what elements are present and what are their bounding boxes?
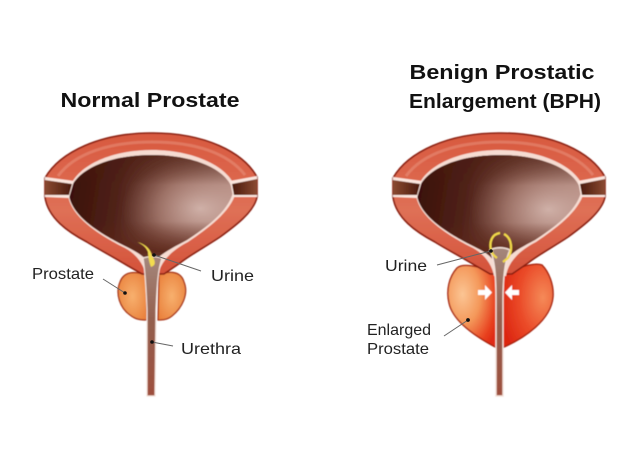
- icon: white arrow right: [478, 285, 492, 300]
- right ureter band: [230, 176, 257, 197]
- icon: white arrow left: [505, 285, 519, 300]
- label: Prostate: Prostate: [32, 266, 94, 283]
- leader line: Urine left: [152, 253, 201, 271]
- left ureter band: [45, 177, 74, 198]
- bladder lumen: [69, 155, 233, 262]
- left ureter band: [393, 177, 422, 198]
- inner pale lining: [68, 150, 236, 276]
- bladder wall: [393, 133, 605, 274]
- right ureter band: [578, 176, 605, 197]
- wall highlight: [58, 142, 245, 176]
- leader line: Urine right: [437, 249, 493, 265]
- prostate: enlarged right lobe: [502, 264, 553, 348]
- label: Enlarged Prostate: Prostate: [367, 341, 429, 358]
- leader line: Enlarged Prostate: [444, 318, 470, 336]
- urethra: [490, 248, 510, 396]
- label: Enlarged Prostate: Enlarged: [367, 322, 431, 339]
- leader line: Urethra: [150, 340, 173, 346]
- urethra: [143, 256, 162, 396]
- title: Benign Prostatic Enlargement (BPH): Enlargement (BPH): [409, 90, 601, 113]
- icon: urine flow yellow: [137, 242, 155, 267]
- icon: urine swirl yellow: [490, 233, 511, 262]
- wall highlight: [406, 142, 593, 176]
- label: Urine left: Urine: [211, 268, 254, 285]
- label: Urethra: Urethra: [181, 341, 241, 358]
- prostate: enlarged left lobe: [448, 265, 497, 348]
- diagram: normal prostate bladder: [45, 133, 257, 396]
- leader line: Prostate: [103, 279, 127, 295]
- bladder lumen: [417, 155, 581, 264]
- title: Benign Prostatic Enlargement (BPH): Benign Prostatic: [410, 61, 594, 84]
- bladder wall: [45, 133, 257, 274]
- title: Normal Prostate: Normal Prostate: [60, 89, 240, 112]
- inner pale lining: [416, 150, 584, 276]
- label: Urine right: Urine: [385, 258, 427, 275]
- prostate: normal: [118, 272, 186, 320]
- label: Enlarged Prostate: [367, 322, 431, 358]
- diagram: enlarged prostate bladder: [393, 133, 605, 396]
- title: Benign Prostatic Enlargement (BPH): [409, 61, 601, 113]
